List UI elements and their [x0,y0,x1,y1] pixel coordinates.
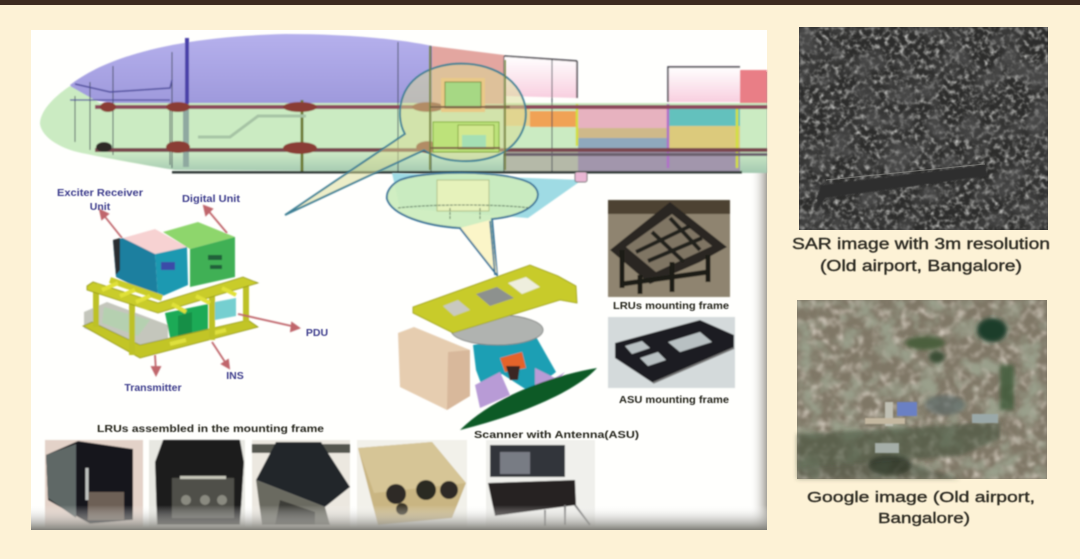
SAR caption [792,236,1050,275]
teal gimbal [473,335,556,392]
photo 1 [45,440,143,527]
tan electronics box [398,327,470,410]
caption: LRUs mounting frame: LRUs mounting frame [613,301,729,312]
label: unit: Unit [90,201,111,213]
caption line 2: Bangalore) [878,510,970,527]
caption line 1: SAR image with 3m resolution [792,236,1050,253]
beam brackets [100,102,444,154]
digital box [163,222,235,287]
mid-section colored bays [504,108,530,126]
SAR image panel [792,27,1050,275]
installed equipment in callout [430,46,510,170]
frame bottom deck [83,320,258,358]
LRU stack on mounting frame [83,222,258,358]
frame legs [96,280,246,355]
upper purple fuselage [70,34,432,104]
satellite image [797,300,1047,479]
photo 5 [486,440,595,527]
label: digital unit: Digital Unit [182,193,241,205]
dark-green antenna plate [460,368,597,430]
photo 2 [149,440,245,527]
caption line 1: Google image (Old airport, [807,489,1035,506]
pointer arrows [100,206,299,375]
photo strip: assembled LRUs [45,440,595,527]
PDU box [215,298,236,320]
frame top deck [87,277,258,313]
photo 3 [252,440,350,527]
caption: ASU mounting frame: ASU mounting frame [619,395,729,406]
label: INS: INS [226,370,244,382]
label: transmitter: Transmitter [124,382,182,394]
yellow mounting frame [413,265,577,333]
transmitter box [84,302,168,352]
label: exciter receiver unit: Exciter Receiver [57,187,143,199]
caption: LRUs assembled: LRUs assembled in the mounting frame [97,424,325,435]
photo: ASU mounting frame [608,317,735,388]
Google caption [807,489,1035,527]
Google image panel [797,300,1047,527]
turntable [451,315,543,345]
lower radome callout [387,172,587,275]
pink tail-section panels [432,46,504,104]
caption: scanner with antenna: Scanner with Antenna(ASU) [474,430,639,441]
scanner with antenna assembly [398,265,597,430]
runway [815,165,988,212]
exciter receiver box [113,229,188,298]
LRU labels [57,187,328,394]
photo captions [97,301,729,441]
photo: LRUs mounting frame [608,200,730,297]
aircraft fuselage cutaway [40,34,767,174]
longitudinal beams [95,105,767,109]
INS box [165,304,208,347]
magnified circle callout with tail [285,46,526,215]
panel: aircraft integration diagram [31,30,767,530]
top dark bar [0,0,1080,5]
photo 4 [357,440,467,527]
caption line 2: (Old airport, Bangalore) [820,258,1022,275]
green lower fuselage [40,86,767,173]
structure frames [75,42,552,172]
SAR speckle image [799,27,1048,230]
label: PDU: PDU [306,327,328,339]
